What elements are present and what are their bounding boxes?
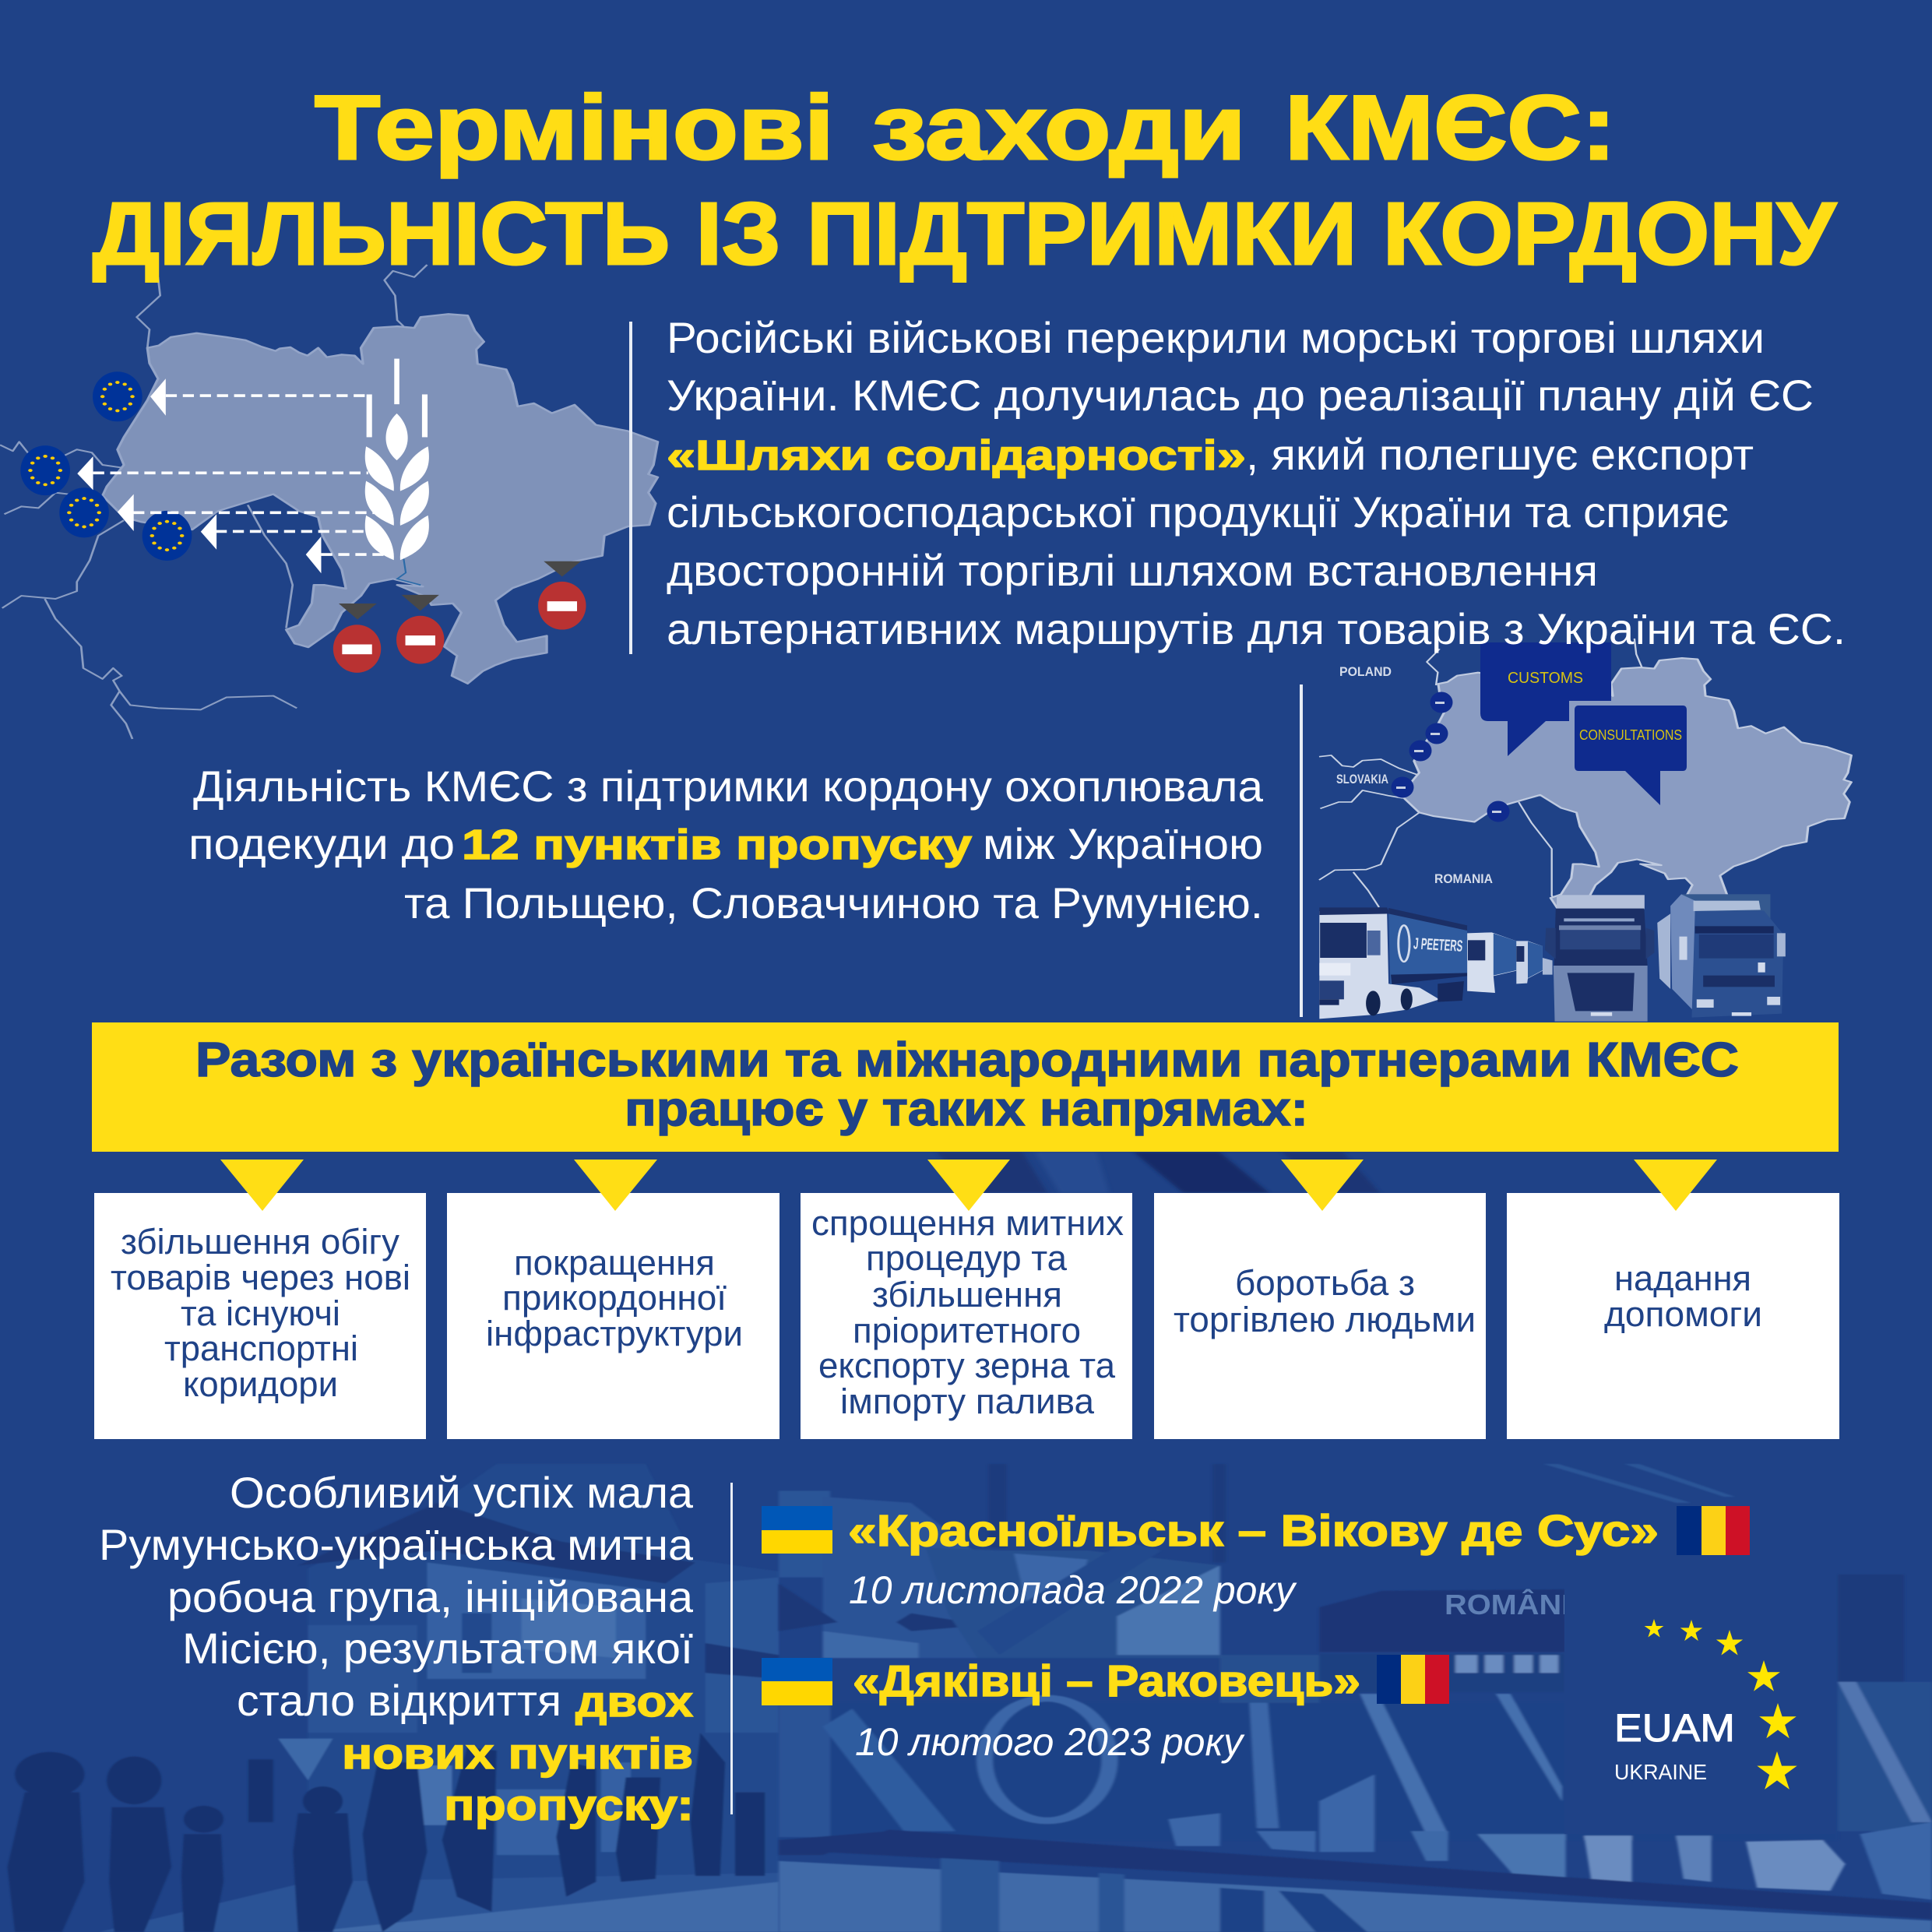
- photo: sign, customs building and snow, right: [779, 1464, 1932, 1932]
- divider: map 2: [1300, 684, 1303, 1017]
- divider: intro text: [629, 322, 632, 654]
- text block: customs working group: стало відкриття: [237, 1676, 561, 1725]
- truck: second and third lorries: [1467, 932, 1553, 993]
- card: customs simplification: пріоритетного: [853, 1311, 1081, 1350]
- logo stars: [1645, 1619, 1797, 1789]
- map 2: Ukraine shape: [1402, 658, 1851, 939]
- text block: 12 crossing points: та Польщею, Словаччиною та Румунією.: [404, 878, 1263, 927]
- card: customs simplification: експорту зерна та: [818, 1346, 1116, 1385]
- map 2: country labels: SLOVAKIA: [1336, 772, 1388, 787]
- card: border infrastructure: [447, 1193, 779, 1439]
- text block: customs working group: [99, 1468, 694, 1829]
- icon: wheat ear: [365, 359, 429, 560]
- text block: customs working group: пропуску:: [444, 1780, 694, 1829]
- title line 1: заходи: [872, 76, 1246, 178]
- route name 1: «Красноїльськ – Вікову де Сус»: [848, 1506, 1659, 1556]
- text block: customs working group: Особливий успіх мала: [230, 1468, 694, 1517]
- callout: customs: [1480, 642, 1611, 756]
- icon: EU flag 1: [93, 371, 143, 421]
- map 2: country labels: [1336, 664, 1493, 886]
- text block: intro: альтернативних маршрутів для товарів з України та ЄС.: [667, 604, 1846, 653]
- map 1: Ukraine shape: [103, 314, 658, 684]
- callout: customs: CUSTOMS: [1508, 670, 1583, 687]
- logo: EUAM Ukraine: EUAM: [1614, 1706, 1735, 1750]
- card: customs simplification: збільшення: [872, 1275, 1062, 1314]
- text block: intro: [667, 313, 1846, 653]
- text block: 12 crossing points: [188, 762, 1264, 927]
- crossing point 1: [762, 1506, 1750, 1612]
- truck: centre Volvo: [1545, 895, 1654, 1022]
- text block: 12 crossing points: 12 пунктів пропуску: [462, 822, 972, 868]
- truck: right Renault: [1657, 894, 1786, 1018]
- flag: Romania: [1377, 1655, 1449, 1704]
- flag: Romania: [1677, 1506, 1750, 1555]
- icon: EU flag 3: [59, 487, 109, 537]
- banner: working directions heading: працює у таких напрямах:: [625, 1082, 1308, 1136]
- arrows: yellow pointers to cards: [220, 1160, 1717, 1211]
- banner: working directions heading: [92, 1022, 1839, 1152]
- card: border infrastructure: покращення: [514, 1243, 715, 1283]
- text block: intro: Російські військові перекрили морські торгові шляхи: [667, 313, 1765, 362]
- card: transport corridors: коридори: [183, 1364, 338, 1404]
- icon: no-entry sign 2: [396, 595, 444, 663]
- card: transport corridors: [94, 1193, 426, 1439]
- flag: Ukraine: [762, 1506, 832, 1554]
- text block: customs working group: Румунсько-українська митна: [99, 1520, 694, 1569]
- card: assistance: [1507, 1193, 1839, 1439]
- map 1: Dnipro river: [397, 559, 421, 585]
- map 1: Ukraine blocked sea routes: [0, 265, 658, 739]
- card: border infrastructure: прикордонної: [502, 1278, 727, 1318]
- card: human trafficking: боротьба з: [1235, 1263, 1415, 1303]
- photo: crowd and houses, left: [8, 1464, 779, 1932]
- icon: no-entry sign 1: [333, 604, 381, 673]
- map 2: country labels: POLAND: [1339, 664, 1392, 679]
- crossing point 2: [762, 1655, 1449, 1764]
- truck: white lorry left: [1319, 907, 1467, 1019]
- text block: 12 crossing points: Діяльність КМЄС з підтримки кордону охоплювала: [193, 762, 1264, 811]
- arrows: grain export routes: [77, 378, 391, 573]
- callout: consultations: CONSULTATIONS: [1579, 727, 1682, 743]
- icon: EU flag 2: [20, 445, 70, 495]
- text block: intro: «Шляхи солідарності»: [667, 432, 1246, 479]
- card: human trafficking: торгівлею людьми: [1174, 1300, 1476, 1339]
- text block: intro: , який полегшує експорт: [1246, 430, 1754, 479]
- date 1: 10 листопада 2022 року: [849, 1568, 1297, 1612]
- card: customs simplification: процедур та: [866, 1238, 1068, 1278]
- card: customs simplification: [801, 1193, 1132, 1439]
- card: border infrastructure: інфраструктури: [486, 1314, 743, 1353]
- title: [93, 76, 1837, 283]
- text block: intro: двосторонній торгівлі шляхом встановлення: [667, 546, 1598, 595]
- title line 1: Термінові: [315, 76, 834, 178]
- text block: customs working group: нових пунктів: [342, 1729, 693, 1778]
- text block: customs working group: Місією, результатом якої: [182, 1624, 693, 1673]
- map 2: border crossing points: [1319, 639, 1851, 1022]
- title line 1: [315, 76, 1616, 178]
- text block: customs working group: двох: [575, 1677, 693, 1726]
- card: transport corridors: збільшення обігу: [121, 1222, 400, 1262]
- text block: intro: сільськогосподарської продукції України та сприяє: [667, 487, 1729, 537]
- map 2: country labels: ROMANIA: [1434, 871, 1493, 886]
- photo: customs building sign: ROMÂNIA: [1445, 1588, 1592, 1621]
- flag: Ukraine: [762, 1658, 832, 1705]
- photo: truck queue: [1319, 894, 1786, 1022]
- title line 1: КМЄС:: [1285, 76, 1616, 178]
- map 2: neighbouring borders: [1319, 639, 1642, 907]
- photo: truck queue: J PEETERS: [1413, 934, 1463, 955]
- map 1: neighbouring borders: [0, 265, 428, 739]
- icon: no-entry sign 3: [538, 561, 586, 630]
- date 2: 10 лютого 2023 року: [855, 1720, 1245, 1764]
- card: human trafficking: [1154, 1193, 1486, 1439]
- title line 2: ДІЯЛЬНІСТЬ ІЗ ПІДТРИМКИ КОРДОНУ: [93, 185, 1837, 283]
- logo: EUAM Ukraine: [1564, 1571, 1836, 1834]
- text block: 12 crossing points: між Україною: [983, 819, 1263, 868]
- callout: consultations: [1575, 706, 1687, 805]
- text block: customs working group: робоча група, ініційована: [167, 1572, 694, 1621]
- route name 2: «Дяківці – Раковець»: [853, 1656, 1360, 1706]
- card: assistance: надання: [1614, 1258, 1751, 1298]
- text block: intro: України. КМЄС долучилась до реалізації плану дій ЄС: [667, 371, 1814, 420]
- card: transport corridors: товарів через нові: [111, 1258, 410, 1297]
- icon: EU flag 4: [143, 511, 192, 561]
- photo: border arch streaks behind cards: [937, 1153, 1380, 1193]
- text block: 12 crossing points: подекуди до: [188, 819, 455, 868]
- card: customs simplification: спрощення митних: [811, 1203, 1124, 1243]
- card: customs simplification: імпорту палива: [840, 1381, 1095, 1421]
- map 2: EUAM crossing markers: [1391, 692, 1509, 822]
- card: assistance: допомоги: [1604, 1294, 1762, 1334]
- card: transport corridors: та існуючі: [181, 1293, 340, 1333]
- logo: EUAM Ukraine: UKRAINE: [1614, 1760, 1707, 1784]
- divider: crossing points: [730, 1483, 733, 1814]
- banner: working directions heading: Разом з українськими та міжнародними партнерами КМЄС: [195, 1033, 1739, 1087]
- card: transport corridors: транспортні: [164, 1328, 358, 1368]
